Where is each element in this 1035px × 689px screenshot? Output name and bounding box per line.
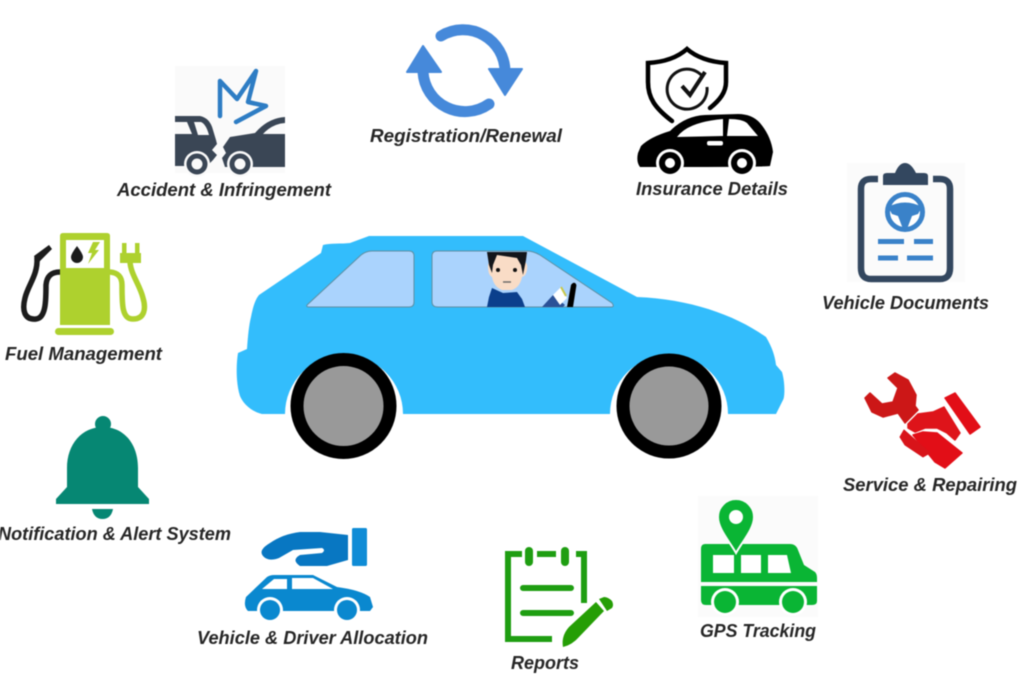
icon: car collision — [175, 66, 285, 177]
driver eyes — [496, 268, 517, 272]
feature: reports — [508, 547, 613, 673]
icon: circular arrows — [407, 30, 522, 112]
icon: hand over car — [245, 528, 373, 623]
feature: insurance details — [636, 49, 788, 199]
icon: wrench and handshake — [865, 373, 980, 468]
feature: gps tracking — [698, 496, 818, 641]
label: GPS Tracking — [700, 620, 816, 641]
driver arm — [542, 295, 565, 307]
feature: vehicle documents — [822, 163, 989, 313]
icon: clipboard with steering wheel — [847, 163, 965, 282]
label: Registration/Renewal — [370, 125, 563, 146]
label: Vehicle Documents — [822, 292, 989, 313]
icon: bell — [56, 416, 149, 519]
central car with driver — [237, 236, 784, 452]
feature: fuel management — [5, 233, 163, 364]
front wheel — [623, 360, 715, 452]
watch — [561, 287, 566, 296]
driver hair — [487, 252, 527, 275]
feature: registration / renewal — [370, 30, 563, 146]
label: Notification & Alert System — [0, 523, 231, 544]
driver torso — [487, 288, 525, 307]
feature: notification and alert system — [0, 416, 231, 544]
rear wheel — [297, 360, 390, 452]
icon: bus with location pin — [698, 496, 818, 617]
shirt cuff — [553, 287, 567, 305]
driver mouth — [503, 281, 511, 283]
front window — [432, 251, 613, 307]
feature: vehicle and driver allocation — [197, 528, 428, 648]
label: Reports — [511, 652, 579, 673]
label: Insurance Details — [636, 178, 788, 199]
icon: notepad and pencil — [508, 547, 613, 647]
feature: accident and infringement — [116, 66, 332, 200]
feature: service and repairing — [843, 373, 1017, 495]
icon: shield with check over car — [637, 49, 773, 177]
steering wheel — [567, 283, 576, 307]
label: Vehicle & Driver Allocation — [197, 627, 428, 648]
label: Service & Repairing — [843, 474, 1017, 495]
driver face — [488, 255, 527, 290]
icon: fuel and electric pump — [24, 233, 144, 335]
label: Fuel Management — [5, 343, 163, 364]
car body — [237, 236, 784, 414]
driver — [487, 252, 576, 307]
label: Accident & Infringement — [116, 179, 332, 200]
rear window — [307, 251, 414, 307]
